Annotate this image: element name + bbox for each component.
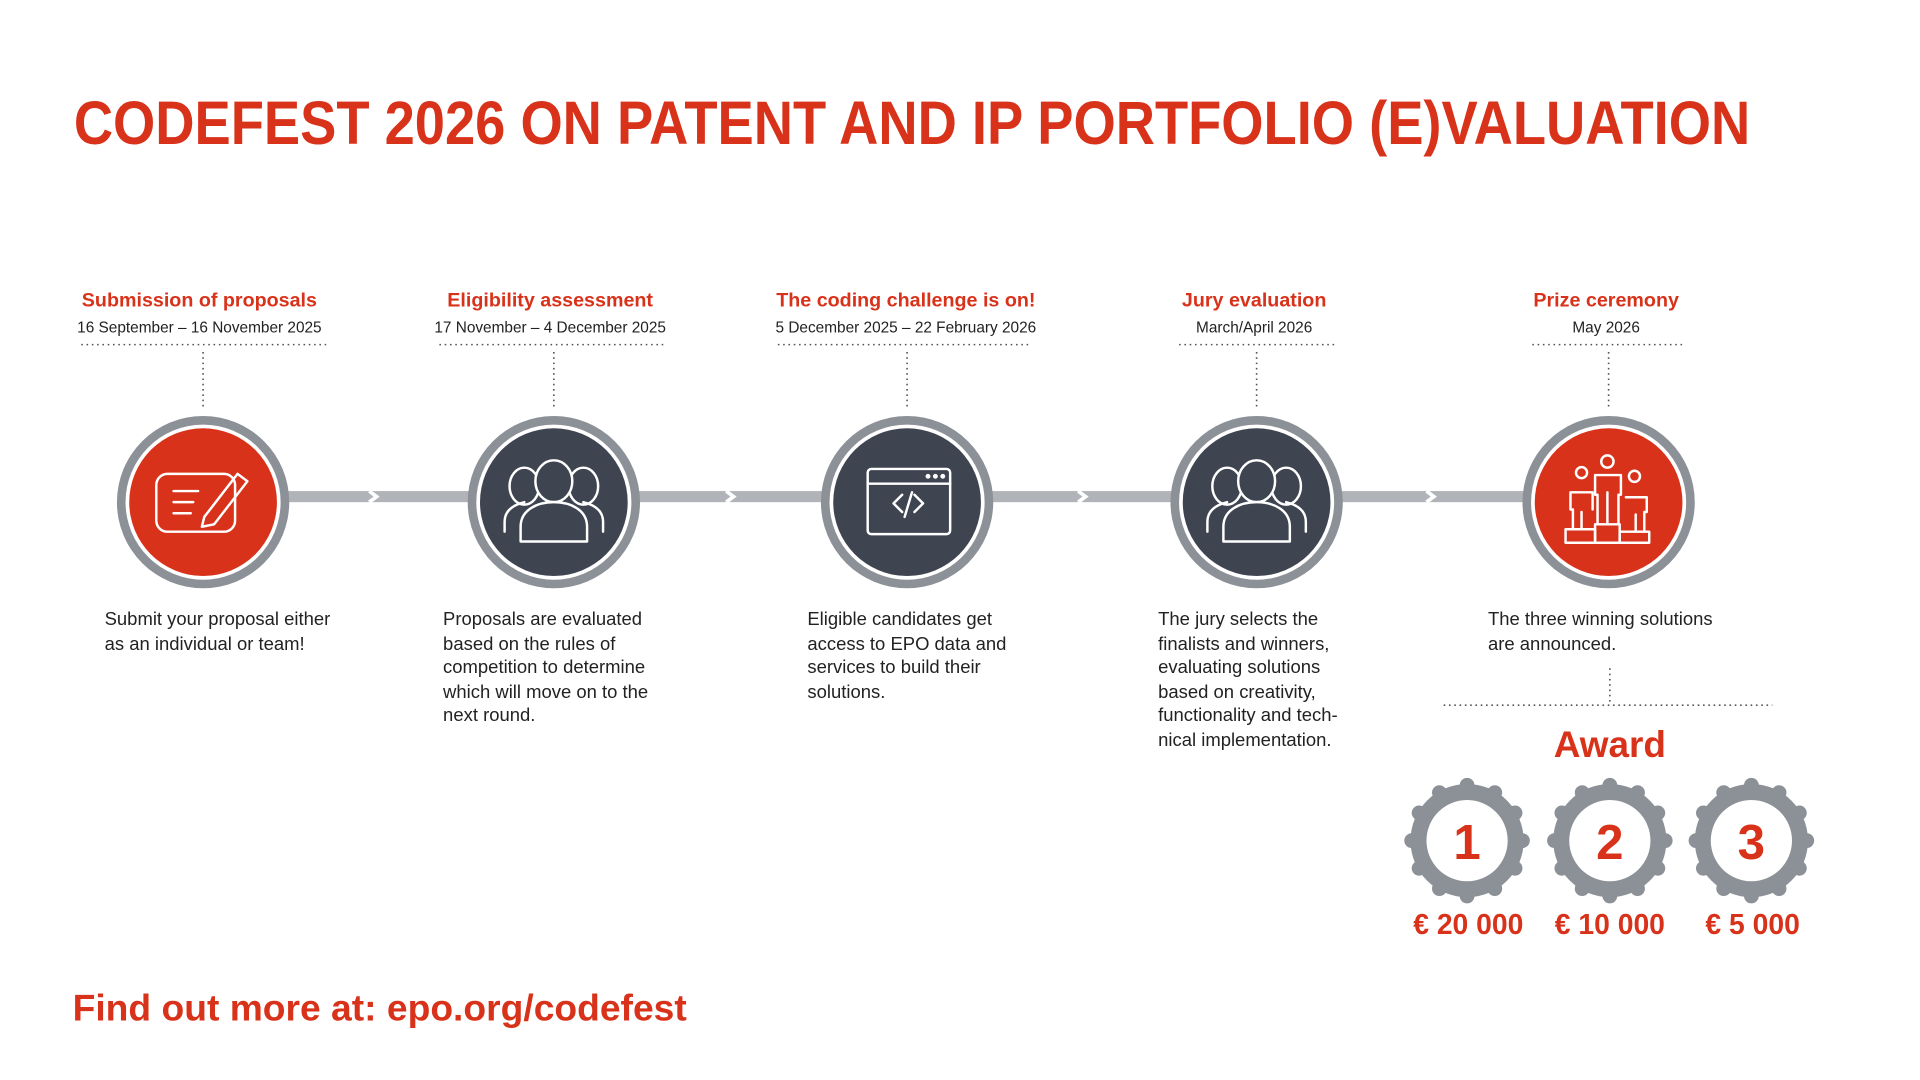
step 3: coding: The coding challenge is on! <box>776 289 1035 311</box>
icon: group <box>1207 460 1306 542</box>
icon: code window <box>868 469 950 534</box>
step 4: jury: based on creativity, <box>1158 681 1316 702</box>
badge 2: 2 <box>1596 815 1624 870</box>
icon: podium with people <box>1566 455 1649 543</box>
step 4: jury: nical implementation. <box>1158 729 1331 750</box>
step 4: jury: functionality and tech- <box>1158 704 1338 725</box>
step 1: submission <box>77 289 330 654</box>
step 2: eligibility: competition to determine <box>443 656 645 677</box>
connector bar <box>283 491 1538 502</box>
step 3: coding: solutions. <box>807 681 885 702</box>
step 4: jury: Jury evaluation <box>1182 289 1326 311</box>
step 3: coding: 5 December 2025 – 22 February 2026 <box>776 319 1036 336</box>
title: CODEFEST 2026 ON PATENT AND IP PORTFOLIO (E)VALUATION <box>74 89 1750 158</box>
badge 1 <box>1404 778 1530 940</box>
step 4: jury <box>1158 289 1343 750</box>
award section <box>1404 668 1814 940</box>
badge 2: € 10 000 <box>1555 908 1665 940</box>
step 4: jury: evaluating solutions <box>1158 656 1320 677</box>
badge 3 <box>1689 778 1814 940</box>
step 4: jury: finalists and winners, <box>1158 633 1329 654</box>
step 2: eligibility: Eligibility assessment <box>447 289 653 311</box>
badge 1: € 20 000 <box>1413 908 1523 940</box>
step 3: coding: access to EPO data and <box>807 633 1006 654</box>
icon: form with pen <box>156 474 247 532</box>
icon: group <box>505 460 603 542</box>
award section: Award <box>1554 724 1666 765</box>
footer: Find out more at: epo.org/codefest <box>73 987 687 1028</box>
step 4: jury: The jury selects the <box>1158 608 1318 629</box>
step 2: eligibility: which will move on to the <box>442 681 648 702</box>
step 2: eligibility: Proposals are evaluated <box>443 608 642 629</box>
step 1: submission: 16 September – 16 November 2025 <box>77 319 322 336</box>
step 2: eligibility: based on the rules of <box>443 633 616 654</box>
step 4: jury: March/April 2026 <box>1196 319 1312 336</box>
step 5: prize ceremony: are announced. <box>1488 633 1616 654</box>
badge 1: 1 <box>1453 815 1481 870</box>
step 1: submission: Submit your proposal either <box>105 608 330 629</box>
step 1: submission: as an individual or team! <box>105 633 305 654</box>
badge 3: € 5 000 <box>1705 908 1800 940</box>
step 2: eligibility: next round. <box>443 704 535 725</box>
step 2: eligibility: 17 November – 4 December 2025 <box>434 319 666 336</box>
step 3: coding <box>776 289 1036 702</box>
step 5: prize ceremony: The three winning solutions <box>1488 608 1713 629</box>
step 1: submission: Submission of proposals <box>82 289 317 311</box>
step 5: prize ceremony: Prize ceremony <box>1533 289 1679 311</box>
step 3: coding: Eligible candidates get <box>807 608 992 629</box>
step 5: prize ceremony: May 2026 <box>1572 319 1640 336</box>
step 5: prize ceremony <box>1488 289 1713 654</box>
step 2: eligibility <box>434 289 666 725</box>
badge 3: 3 <box>1738 815 1765 870</box>
step 3: coding: services to build their <box>807 656 981 677</box>
badge 2 <box>1547 778 1673 940</box>
